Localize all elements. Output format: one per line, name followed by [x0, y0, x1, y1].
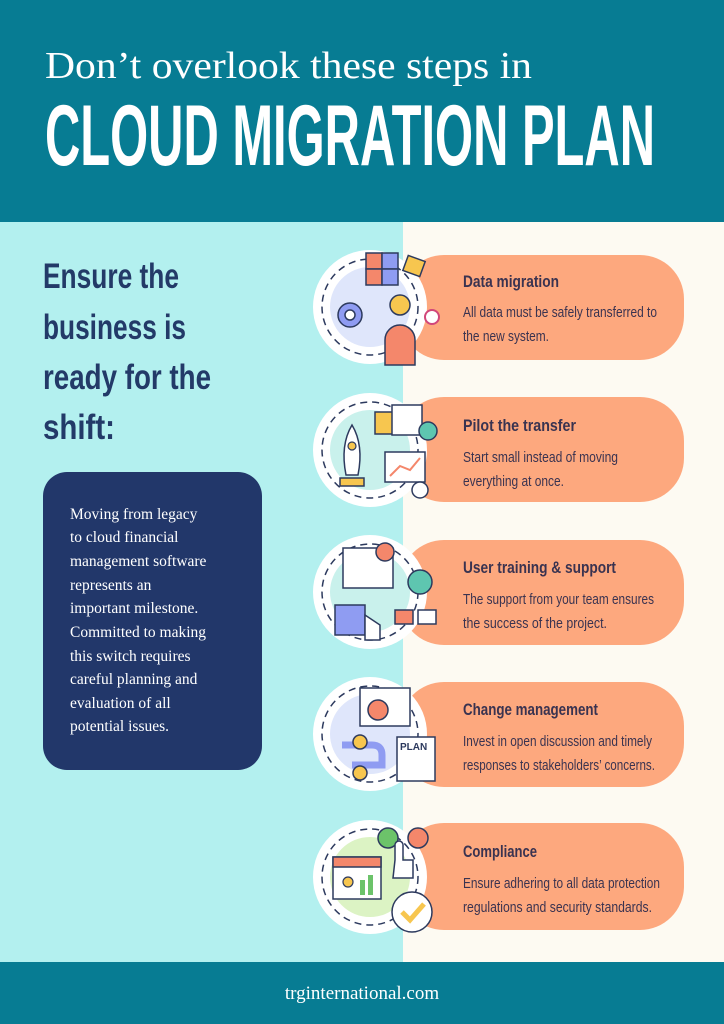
title: change management: Change management: [463, 700, 598, 719]
left heading: Ensure the: [43, 257, 179, 296]
intro text box: evaluation of all: [70, 695, 171, 712]
title: data migration: Data migration: [463, 272, 559, 291]
step 5: compliance: Ensure adhering to all data protection: [463, 875, 660, 892]
intro text box: potential issues.: [70, 718, 169, 735]
step 4: change management: responses to stakeholders’ concerns.: [463, 757, 655, 774]
icon: rocket and documents: [313, 393, 437, 507]
intro text box: Moving from legacy: [70, 506, 198, 523]
step 2: pilot the transfer: everything at once.: [463, 473, 564, 490]
step 5: compliance: [313, 820, 684, 934]
step 4: change management: Invest in open discussion and timely: [463, 733, 652, 750]
icon: puzzle and person: [313, 250, 439, 365]
footer: trginternational.com: [285, 983, 439, 1004]
icon: checkmarks and dashboard: [313, 820, 432, 934]
intro text box: management software: [70, 553, 207, 570]
icon: plan board: [313, 677, 435, 791]
header: [0, 0, 724, 222]
intro text box: [43, 472, 262, 770]
intro text box: careful planning and: [70, 671, 198, 688]
title: user training: User training & support: [463, 558, 616, 577]
left heading: [43, 257, 211, 447]
title: pilot: Pilot the transfer: [463, 416, 576, 435]
footer: [0, 962, 724, 1024]
step 3: user training: the success of the project.: [463, 615, 607, 632]
intro text box: to cloud financial: [70, 529, 178, 546]
step 3: user training: The support from your team ensures: [463, 591, 654, 608]
step 4: change management: [313, 677, 684, 791]
step 1: data migration: the new system.: [463, 328, 549, 345]
step 2: pilot the transfer: Start small instead of moving: [463, 449, 618, 466]
left heading: business is: [43, 308, 186, 347]
step 1: data migration: [313, 250, 684, 365]
step 5: compliance: regulations and security standards.: [463, 899, 652, 916]
left heading: shift:: [43, 408, 115, 447]
title: compliance: Compliance: [463, 842, 537, 861]
step 2: pilot the transfer: [313, 393, 684, 507]
intro text box: important milestone.: [70, 600, 198, 617]
step 1: data migration: All data must be safely transferred to: [463, 304, 657, 321]
intro text box: represents an: [70, 577, 152, 594]
step 3: user training: [313, 535, 684, 649]
intro text box: this switch requires: [70, 648, 191, 665]
subtitle: Don’t overlook these steps in: [45, 45, 532, 87]
icon: training screens: [313, 535, 436, 649]
left heading: ready for the: [43, 358, 211, 397]
icon: plan board: PLAN: [400, 742, 427, 753]
intro text box: Committed to making: [70, 624, 206, 641]
